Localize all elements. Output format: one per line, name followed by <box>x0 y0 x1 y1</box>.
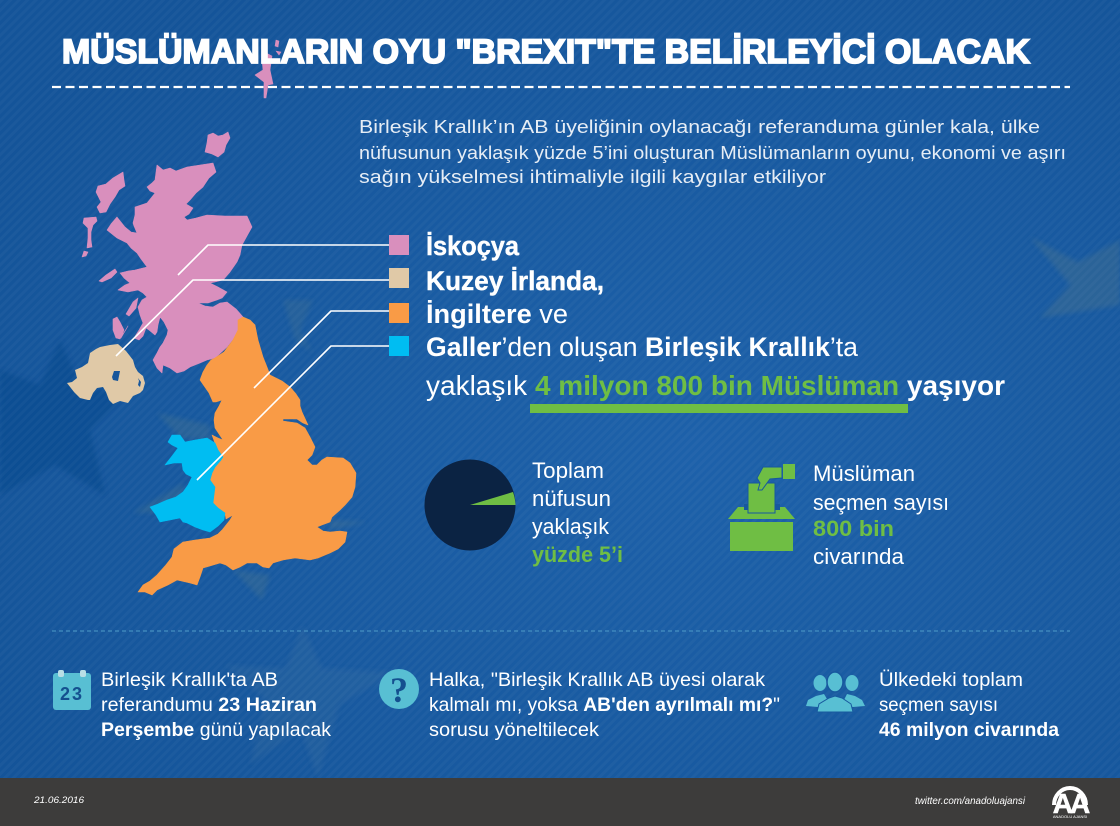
population share text: yüzde 5’i <box>532 542 623 567</box>
intro text: sağın yükselmesi ihtimaliyle ilgili kaygılar etkiliyor <box>359 166 826 187</box>
logo: Anadolu Agency: ANADOLU AJANSI <box>1053 814 1087 819</box>
logo: Anadolu Agency: AA <box>1053 788 1090 819</box>
referendum date text: Perşembe günü yapılacak <box>101 719 331 741</box>
voter count text: 800 bin <box>813 516 894 541</box>
voter count text: seçmen sayısı <box>813 490 949 515</box>
title divider <box>52 86 1070 88</box>
referendum date text: referandumu 23 Haziran <box>101 694 317 716</box>
footer date: 21.06.2016 <box>33 795 85 806</box>
referendum date text <box>101 669 331 741</box>
referendum question text: sorusu yöneltilecek <box>429 719 599 741</box>
electorate text: Ülkedeki toplam <box>879 669 1023 691</box>
legend: İngiltere: İngiltere ve <box>426 299 568 329</box>
legend: İskoçya: İskoçya <box>426 231 520 261</box>
population share text: Toplam <box>532 458 604 483</box>
icon: question mark <box>379 669 419 710</box>
voter count text <box>813 461 949 569</box>
headline: 4 milyon 800 bin: yaklaşık 4 milyon 800 bin Müslüman yaşıyor <box>426 370 1005 401</box>
map region: Scotland <box>82 40 281 373</box>
map region: England <box>138 317 356 595</box>
population share text <box>532 458 623 567</box>
map region: Northern Ireland <box>67 344 145 404</box>
icon: calendar: 23 <box>60 684 84 704</box>
electorate text: 46 milyon civarında <box>879 719 1059 741</box>
voter count text: civarında <box>813 544 905 569</box>
lower divider <box>52 630 1070 632</box>
icon: voters <box>806 672 865 712</box>
population share text: nüfusun <box>532 486 611 511</box>
icon: calendar <box>53 670 91 710</box>
voter count text: Müslüman <box>813 461 915 486</box>
map: United Kingdom <box>67 40 389 595</box>
footer bar <box>0 778 1120 826</box>
legend: Kuzey İrlanda: Kuzey İrlanda, <box>426 266 604 296</box>
referendum question text: kalmalı mı, yoksa AB'den ayrılmalı mı?" <box>429 694 780 716</box>
population share text: yaklaşık <box>532 514 610 539</box>
referendum question text <box>429 669 780 741</box>
title: MÜSLÜMANLARIN OYU "BREXIT"TE BELİRLEYİCİ OLACAK <box>62 33 1030 71</box>
referendum question text: Halka, "Birleşik Krallık AB üyesi olarak <box>429 669 765 691</box>
intro text: Birleşik Krallık’ın AB üyeliğinin oylanacağı referanduma günler kala, ülke <box>359 116 1040 137</box>
icon: question mark: ? <box>390 670 408 710</box>
pie chart <box>424 460 516 550</box>
footer twitter: twitter.com/anadoluajansi <box>915 795 1026 807</box>
map region: Wales <box>150 435 225 532</box>
icon: ballot box <box>728 464 795 551</box>
legend: Galler: Galler’den oluşan Birleşik Krallık’ta <box>426 332 859 362</box>
legend: İskoçya <box>389 231 520 261</box>
leader lines <box>116 245 389 480</box>
electorate text <box>879 669 1059 741</box>
referendum date text: Birleşik Krallık'ta AB <box>101 669 278 691</box>
legend <box>389 231 859 362</box>
intro text: nüfusunun yaklaşık yüzde 5’ini oluşturan Müslümanların oyunu, ekonomi ve aşırı <box>359 142 1066 163</box>
electorate text: seçmen sayısı <box>879 694 998 716</box>
intro text <box>359 116 1066 187</box>
